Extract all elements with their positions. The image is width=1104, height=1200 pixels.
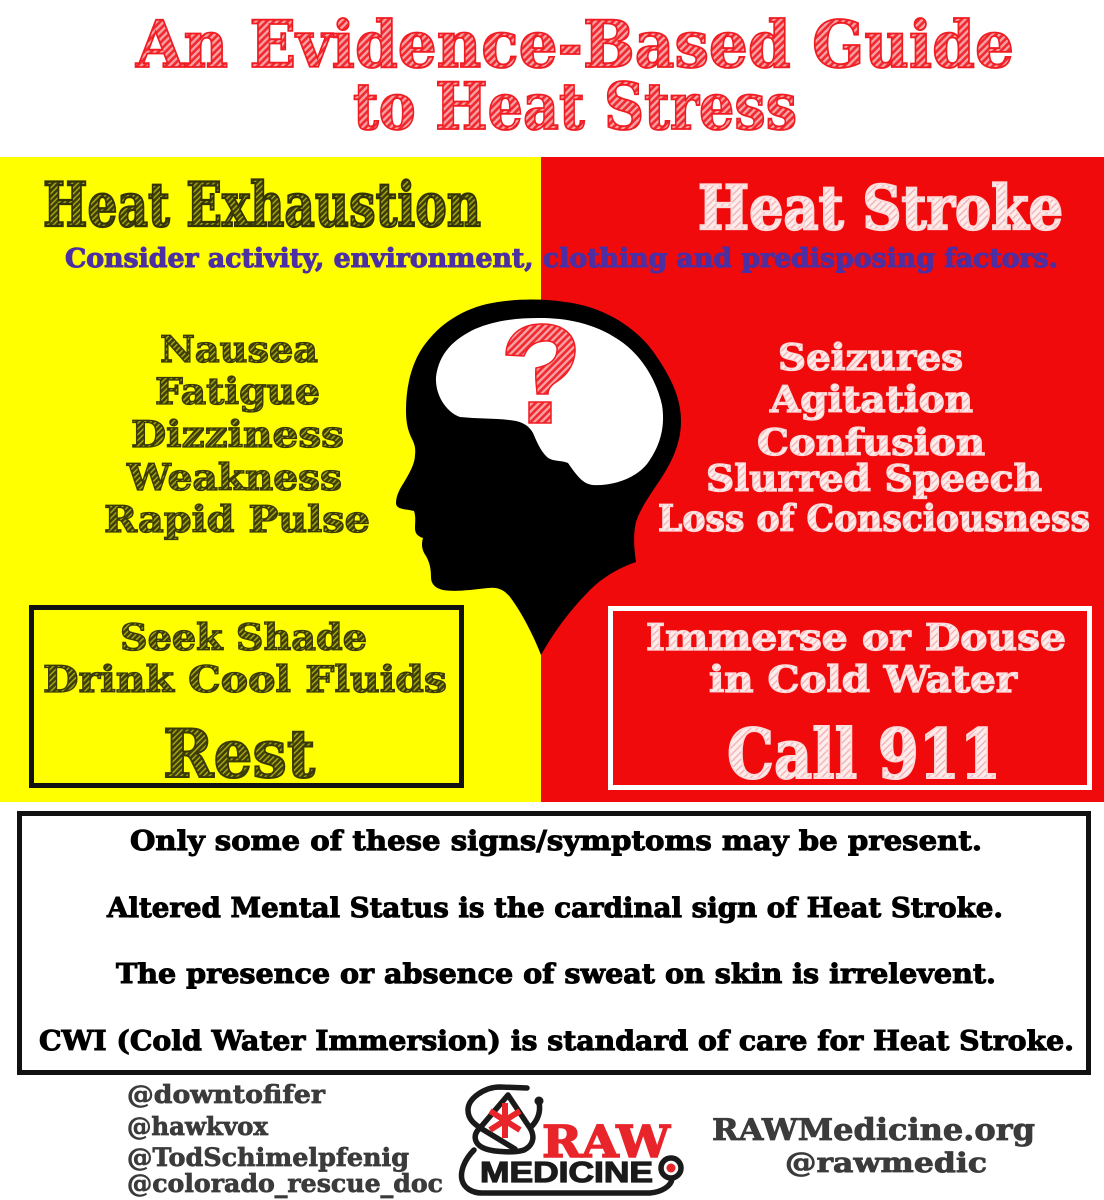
social handles: @TodSchimelpfenig bbox=[127, 1143, 409, 1172]
social handles: @hawkvox bbox=[127, 1112, 269, 1141]
treatment box: heat stroke: Call 911 bbox=[727, 715, 1001, 795]
symptoms: heat exhaustion bbox=[104, 329, 370, 541]
symptoms: heat exhaustion: Rapid Pulse bbox=[104, 499, 370, 541]
symptoms: heat stroke: Loss of Consciousness bbox=[658, 498, 1090, 540]
notes box: Only some of these signs/symptoms may be present. bbox=[130, 826, 982, 857]
symptoms: heat stroke: Slurred Speech bbox=[706, 458, 1042, 500]
notes box: Altered Mental Status is the cardinal sign of Heat Stroke. bbox=[106, 893, 1003, 924]
symptoms: heat exhaustion: Fatigue bbox=[155, 371, 320, 413]
logo wordmark: RAW bbox=[542, 1117, 671, 1168]
website and handle: @rawmedic bbox=[785, 1148, 987, 1179]
symptoms: heat exhaustion: Dizziness bbox=[131, 414, 344, 456]
symptoms: heat stroke: Confusion bbox=[757, 422, 985, 464]
icon: head silhouette with brain and question mark bbox=[396, 300, 681, 655]
title: An Evidence-Based Guide bbox=[135, 7, 1014, 83]
treatment box: heat exhaustion: Drink Cool Fluids bbox=[43, 659, 447, 701]
social handles: @downtofifer bbox=[127, 1080, 326, 1109]
treatment box: heat exhaustion: Seek Shade bbox=[120, 617, 367, 659]
panel: heat exhaustion bbox=[0, 157, 541, 802]
earpiece dot bbox=[666, 1164, 676, 1172]
stethoscope bbox=[462, 1087, 681, 1193]
symptoms: heat stroke: Agitation bbox=[769, 379, 973, 421]
panel: heat stroke bbox=[541, 157, 1104, 802]
treatment box: heat stroke: in Cold Water bbox=[709, 659, 1018, 701]
symptoms: heat exhaustion: Weakness bbox=[126, 457, 342, 499]
treatment box: heat stroke: Immerse or Douse bbox=[646, 617, 1066, 659]
question mark bbox=[506, 324, 575, 423]
heading: heat exhaustion: Heat Exhaustion bbox=[43, 170, 481, 241]
social handles bbox=[127, 1080, 443, 1198]
title bbox=[135, 7, 1014, 145]
star of life bbox=[490, 1103, 520, 1138]
subtitle: considerations: Consider activity, environment, clothing and predisposing factors. bbox=[65, 244, 1058, 274]
social handles: @colorado_rescue_doc bbox=[127, 1169, 443, 1198]
website and handle: RAWMedicine.org bbox=[712, 1113, 1035, 1148]
symptoms: heat exhaustion: Nausea bbox=[160, 329, 318, 371]
treatment box: heat stroke bbox=[610, 608, 1090, 795]
notes box: CWI (Cold Water Immersion) is standard of care for Heat Stroke. bbox=[39, 1026, 1074, 1057]
logo: RAW Medicine: MEDICINE bbox=[480, 1157, 653, 1189]
heading: heat stroke: Heat Stroke bbox=[698, 173, 1063, 244]
notes box: The presence or absence of sweat on skin is irrelevent. bbox=[116, 959, 996, 990]
website and handle bbox=[712, 1113, 1035, 1179]
stethoscope chest piece end bbox=[534, 1096, 544, 1106]
symptoms: heat stroke bbox=[658, 337, 1090, 540]
title: to Heat Stress bbox=[353, 69, 797, 145]
brain bbox=[436, 318, 663, 485]
logo: RAW Medicine bbox=[462, 1087, 681, 1193]
symptoms: heat stroke: Seizures bbox=[778, 337, 963, 379]
treatment box: heat exhaustion: Rest bbox=[163, 715, 315, 793]
notes box bbox=[20, 814, 1088, 1072]
treatment box: heat exhaustion bbox=[32, 608, 462, 793]
